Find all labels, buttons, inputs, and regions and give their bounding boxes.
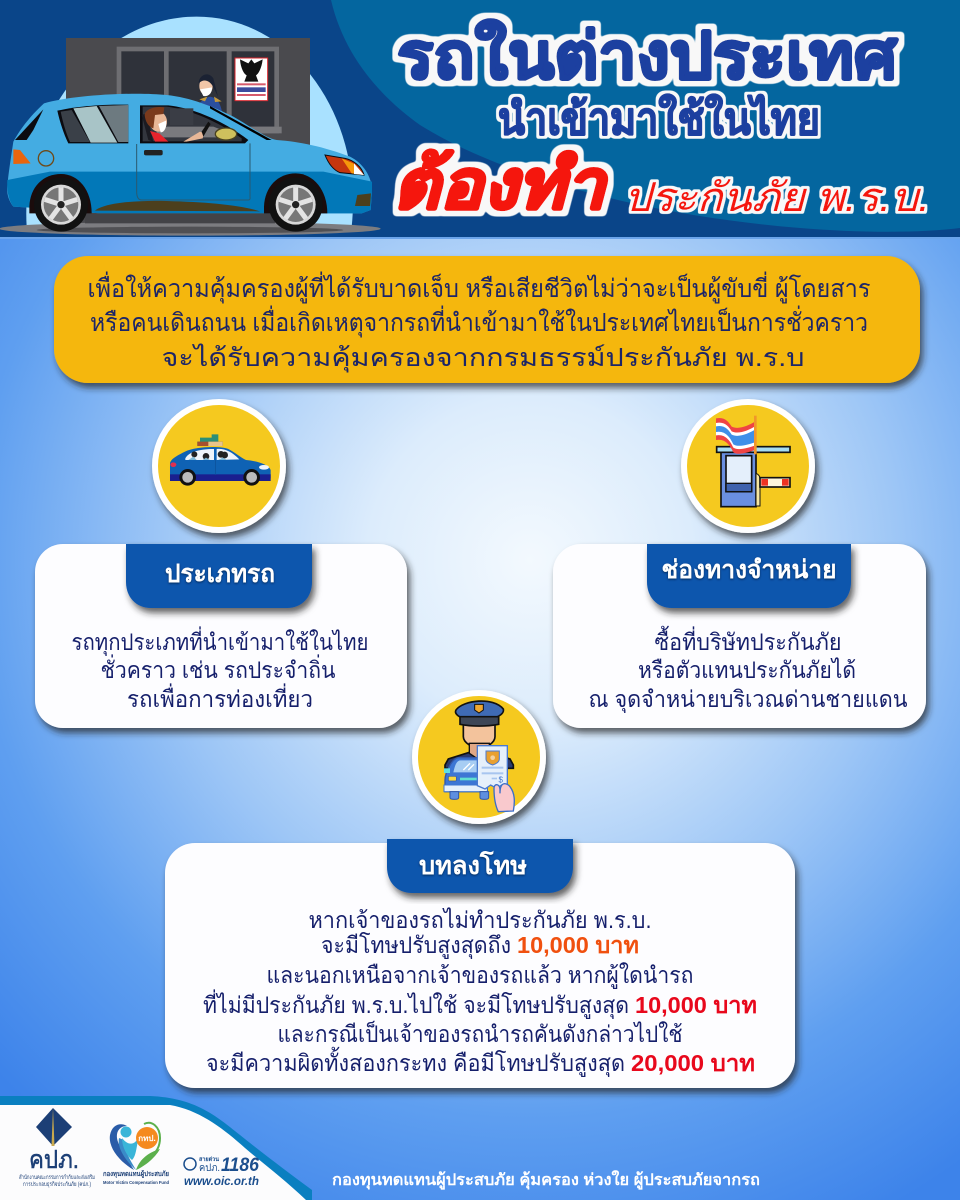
panel: penalties: จะมีโทษปรับสูงสุดถึง: [321, 932, 511, 959]
panel: vehicle type: [35, 544, 407, 728]
panel: sales channels: [553, 544, 926, 728]
intro yellow panel: จะได้รับความคุ้มครองจากกรมธรรม์ประกันภัย พ.ร.บ: [162, 343, 804, 373]
icon: police officer with fine ticket: [412, 690, 546, 824]
hotline and website: www.oic.or.th: [184, 1174, 259, 1188]
driver: [142, 107, 237, 142]
tab: sales channels heading: [647, 544, 851, 608]
illustration: car at the border booth: [0, 17, 381, 236]
logo: OIC: การประกอบธุรกิจประกันภัย (คปภ.): [23, 1181, 91, 1188]
panel: penalties: 10,000 บาท: [635, 992, 757, 1018]
officer: [190, 74, 224, 125]
panel: vehicle type: รถทุกประเภทที่นำเข้ามาใช้ในไทย: [72, 626, 368, 656]
header banner: [0, 0, 960, 239]
icon: police officer with fine ticket: $: [498, 775, 503, 784]
panel: vehicle type: ชั่วคราว เช่น รถประจำถิ่น: [100, 654, 336, 683]
intro yellow panel: เพื่อให้ความคุ้มครองผู้ที่ได้รับบาดเจ็บ หรือเสียชีวิตไม่ว่าจะเป็นผู้ขับขี่ ผู้โดยสาร: [88, 271, 870, 304]
logo: OIC: คปภ.: [29, 1146, 79, 1174]
front wheel: [264, 173, 327, 232]
car body: [7, 94, 372, 213]
logo: Motor Victim Compensation Fund: กทป.: [138, 1134, 156, 1143]
footer tagline: กองทุนทดแทนผู้ประสบภัย คุ้มครอง ห่วงใย ผู้ประสบภัยจากรถ: [332, 1170, 760, 1191]
panel: penalties: และกรณีเป็นเจ้าของรถนำรถคันดังกล่าวไปใช้: [278, 1019, 682, 1047]
title line 1: รถในต่างประเทศ: [397, 19, 898, 92]
panel: penalties: ที่ไม่มีประกันภัย พ.ร.บ.ไปใช้ จะมีโทษปรับสูงสุด: [203, 989, 629, 1019]
panel: penalties: 10,000 บาท: [517, 932, 639, 958]
hotline and website: สายด่วน: [199, 1156, 220, 1163]
tab: penalties heading: บทลงโทษ: [419, 850, 527, 880]
logo: Motor Victim Compensation Fund: กองทุนทดแทนผู้ประสบภัย: [103, 1169, 169, 1179]
title insurance: ประกันภัย พ.ร.บ.: [624, 176, 930, 220]
tab: vehicle type heading: [126, 544, 312, 608]
light blue sun circle: [26, 17, 353, 227]
hotline and website: คปภ.: [199, 1163, 220, 1174]
icon: border barrier with flag: [681, 399, 815, 533]
icon: family car: [152, 399, 286, 533]
rear wheel: [29, 174, 92, 232]
tab: sales channels heading: ช่องทางจำหน่าย: [662, 556, 836, 584]
panel: penalties: หากเจ้าของรถไม่ทำประกันภัย พ.ร.บ.: [308, 907, 652, 933]
logo: OIC: สำนักงานคณะกรรมการกำกับและส่งเสริม: [19, 1174, 95, 1181]
logo: Motor Victim Compensation Fund: [103, 1123, 169, 1185]
title: [393, 19, 930, 223]
panel: vehicle type: รถเพื่อการท่องเที่ยว: [127, 683, 313, 712]
panel: sales channels: หรือตัวแทนประกันภัยได้: [638, 657, 856, 683]
car details: [13, 143, 371, 211]
logo: OIC: [19, 1108, 95, 1188]
ground shadow: [0, 213, 381, 236]
panel: penalties: [165, 839, 795, 1088]
hotline and website: [184, 1155, 259, 1188]
title line 2: นำเข้ามาใช้ในไทย: [498, 93, 820, 144]
emblem sign: [235, 58, 268, 101]
title red emphasis: ต้องทำ: [393, 147, 608, 223]
panel: penalties: 20,000 บาท: [631, 1050, 755, 1076]
panel: sales channels: ซื้อที่บริษัทประกันภัย: [654, 626, 842, 655]
panel: penalties: จะมีความผิดทั้งสองกระทง คือมีโทษปรับสูงสุด: [206, 1047, 625, 1077]
tab: vehicle type heading: ประเภทรถ: [165, 560, 275, 588]
car lower body band: [7, 172, 372, 213]
intro yellow panel: [54, 256, 920, 383]
panel: penalties: และนอกเหนือจากเจ้าของรถแล้ว หากผู้ใดนำรถ: [266, 962, 694, 989]
hotline and website: 1186: [221, 1155, 259, 1176]
footer panel: [0, 1096, 312, 1200]
tab: penalties heading: [387, 839, 573, 893]
logo: Motor Victim Compensation Fund: Motor Victim Compensation Fund: [103, 1180, 169, 1185]
panel: sales channels: ณ จุดจำหน่ายบริเวณด่านชายแดน: [588, 686, 908, 713]
car windows: [15, 105, 272, 143]
booth building: [66, 38, 310, 225]
intro yellow panel: หรือคนเดินถนน เมื่อเกิดเหตุจากรถที่นำเข้ามาใช้ในประเทศไทยเป็นการชั่วคราว: [90, 305, 868, 338]
